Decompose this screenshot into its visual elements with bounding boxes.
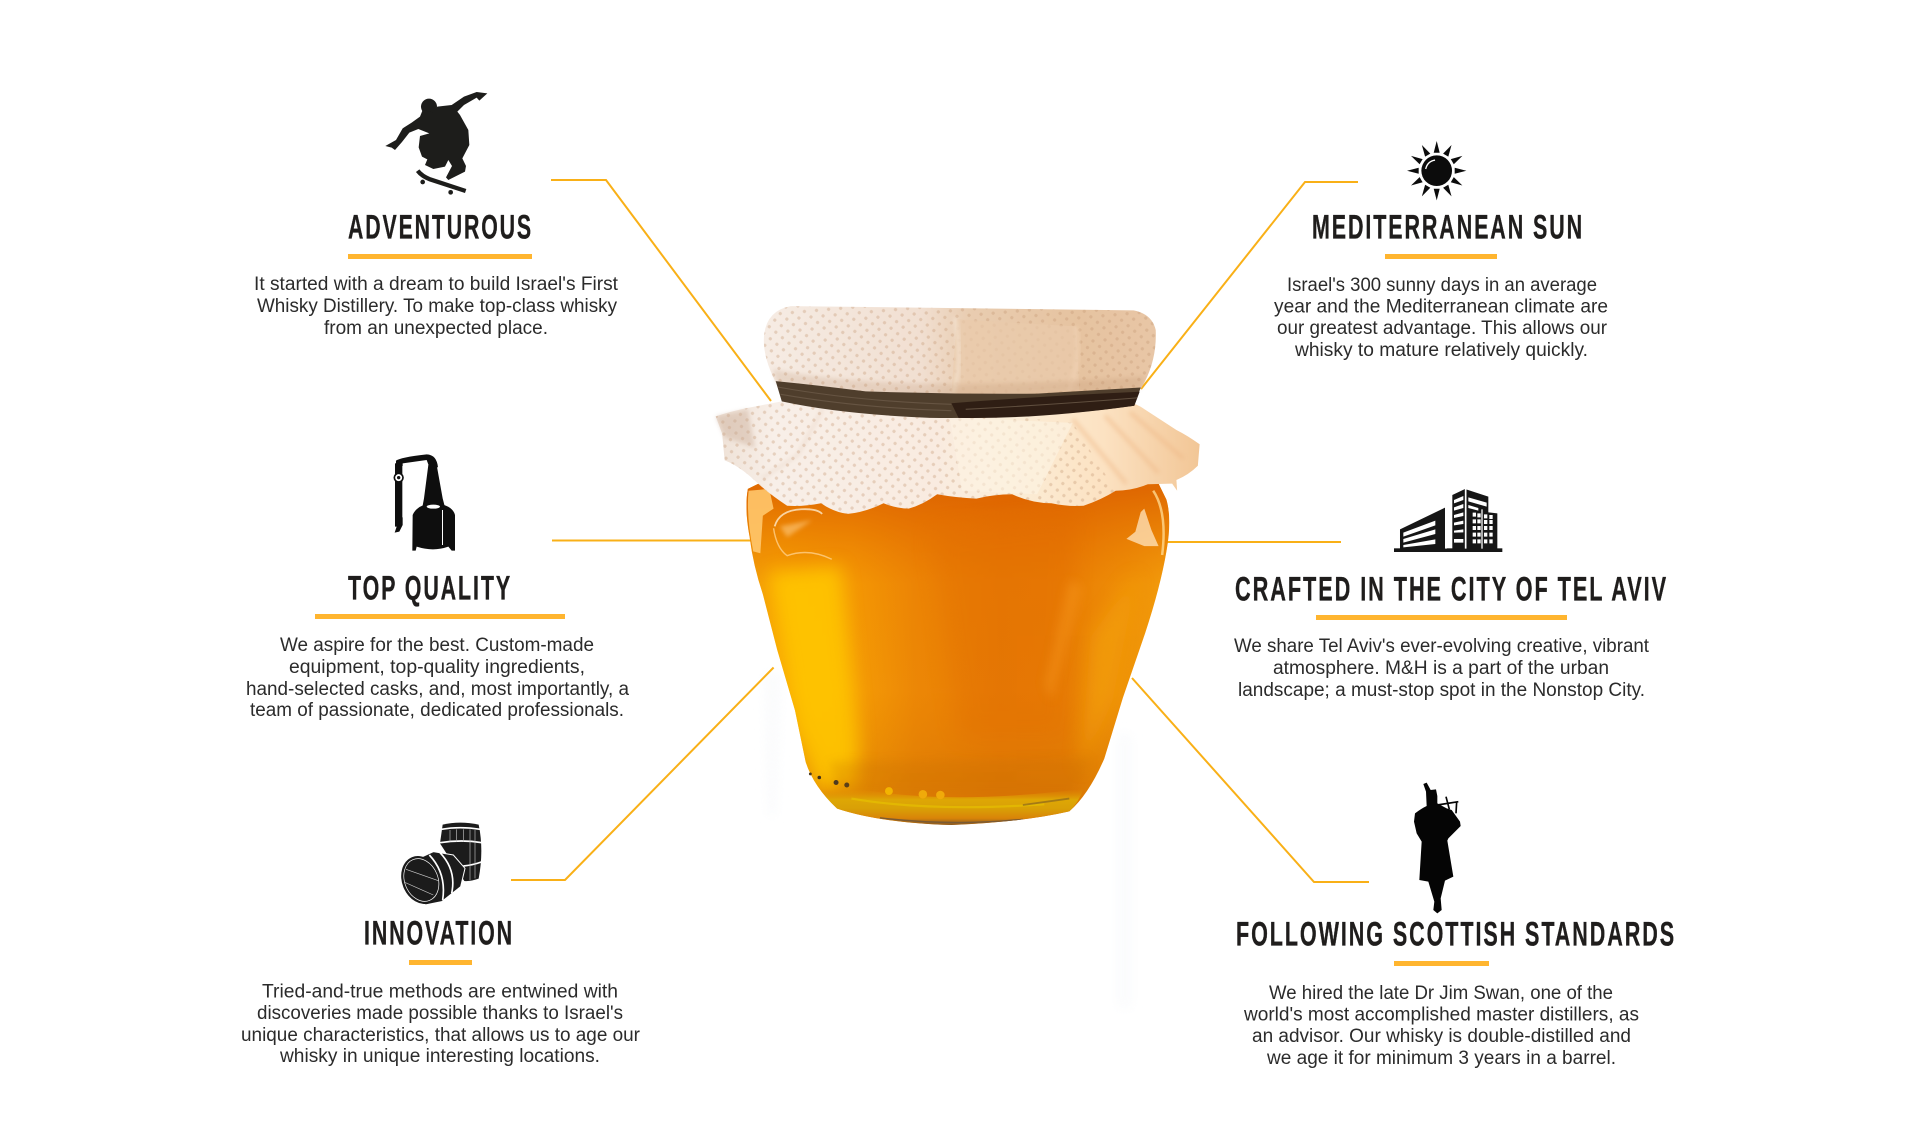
cord band (776, 381, 1141, 418)
body text: discoveries made possible thanks to Israel's (257, 1003, 623, 1024)
body text: We hired the late Dr Jim Swan, one of the (1269, 983, 1613, 1004)
body text: team of passionate, dedicated professionals. (250, 700, 624, 721)
body text: We aspire for the best. Custom-made (280, 635, 594, 656)
jar base glass (821, 791, 1082, 825)
body text: we age it for minimum 3 years in a barrel. (1266, 1048, 1616, 1069)
body text: Whisky Distillery. To make top-class whisky (257, 296, 617, 317)
upright barrel (440, 823, 482, 881)
body text: atmosphere. M&H is a part of the urban (1273, 658, 1609, 679)
honey body (741, 480, 1176, 830)
panel: crafted in the city of tel aviv (1234, 489, 1668, 701)
icon: barrels (394, 823, 482, 910)
body text (1274, 275, 1608, 361)
leader line: crafted in tel aviv (1167, 541, 1341, 543)
underline (409, 960, 472, 965)
leader line: top quality (552, 540, 752, 542)
lying barrel (394, 850, 465, 910)
heading: ADVENTUROUS (348, 208, 533, 246)
leader line: scottish standards (1132, 678, 1369, 882)
leader line: innovation (511, 668, 774, 880)
body text: landscape; a must-stop spot in the Nonstop City. (1238, 680, 1645, 701)
body text (254, 274, 619, 339)
icon: bagpiper (1414, 783, 1461, 913)
body text (241, 982, 641, 1067)
underline (1385, 254, 1497, 259)
underline (1316, 615, 1567, 620)
panel: following scottish standards (1236, 783, 1676, 1069)
icon: sun (1407, 141, 1466, 200)
body text: Tried-and-true methods are entwined with (262, 982, 618, 1002)
body text: an advisor. Our whisky is double-distilled and (1252, 1026, 1631, 1047)
body text: year and the Mediterranean climate are (1274, 296, 1608, 318)
heading: FOLLOWING SCOTTISH STANDARDS (1236, 916, 1676, 954)
body text (1243, 983, 1639, 1069)
body text: unique characteristics, that allows us to age our (241, 1025, 641, 1046)
body text: Israel's 300 sunny days in an average (1287, 275, 1597, 296)
body text (246, 635, 629, 721)
infographic canvas (242, 92, 1674, 1068)
body text: It started with a dream to build Israel's First (254, 274, 619, 295)
panel: adventurous (254, 92, 619, 339)
cloth cap (764, 306, 1156, 400)
leader line: mediterranean sun (1141, 182, 1358, 389)
icon: pot still (394, 454, 455, 551)
underline (1394, 961, 1489, 966)
icon: skateboarder (385, 92, 487, 195)
body text: We share Tel Aviv's ever-evolving creative, vibrant (1234, 636, 1650, 657)
icon: buildings (1394, 489, 1502, 552)
panel: mediterranean sun (1274, 141, 1608, 361)
body text (1234, 636, 1650, 701)
heading: INNOVATION (364, 914, 514, 952)
body text: whisky to mature relatively quickly. (1294, 340, 1588, 361)
heading: MEDITERRANEAN SUN (1312, 208, 1584, 246)
body text: whisky in unique interesting locations. (279, 1046, 600, 1067)
heading: TOP QUALITY (348, 570, 512, 608)
bubbles (809, 772, 945, 799)
jar illustration (716, 306, 1200, 830)
glass highlight left (748, 489, 832, 559)
panel: top quality (246, 454, 629, 721)
underline (348, 254, 532, 259)
panel: innovation (241, 823, 641, 1067)
heading: CRAFTED IN THE CITY OF TEL AVIV (1235, 570, 1668, 608)
body text: world's most accomplished master distillers, as (1243, 1004, 1639, 1026)
cloth skirt (716, 401, 1200, 514)
leader line: adventurous (551, 180, 771, 401)
body text: hand-selected casks, and, most importantly, a (246, 679, 629, 700)
underline (315, 614, 565, 619)
jar backdrop shading (764, 673, 1132, 1009)
glass highlight right (1126, 491, 1164, 555)
body text: our greatest advantage. This allows our (1277, 318, 1608, 339)
body text: from an unexpected place. (324, 318, 548, 339)
body text: equipment, top-quality ingredients, (289, 657, 585, 678)
